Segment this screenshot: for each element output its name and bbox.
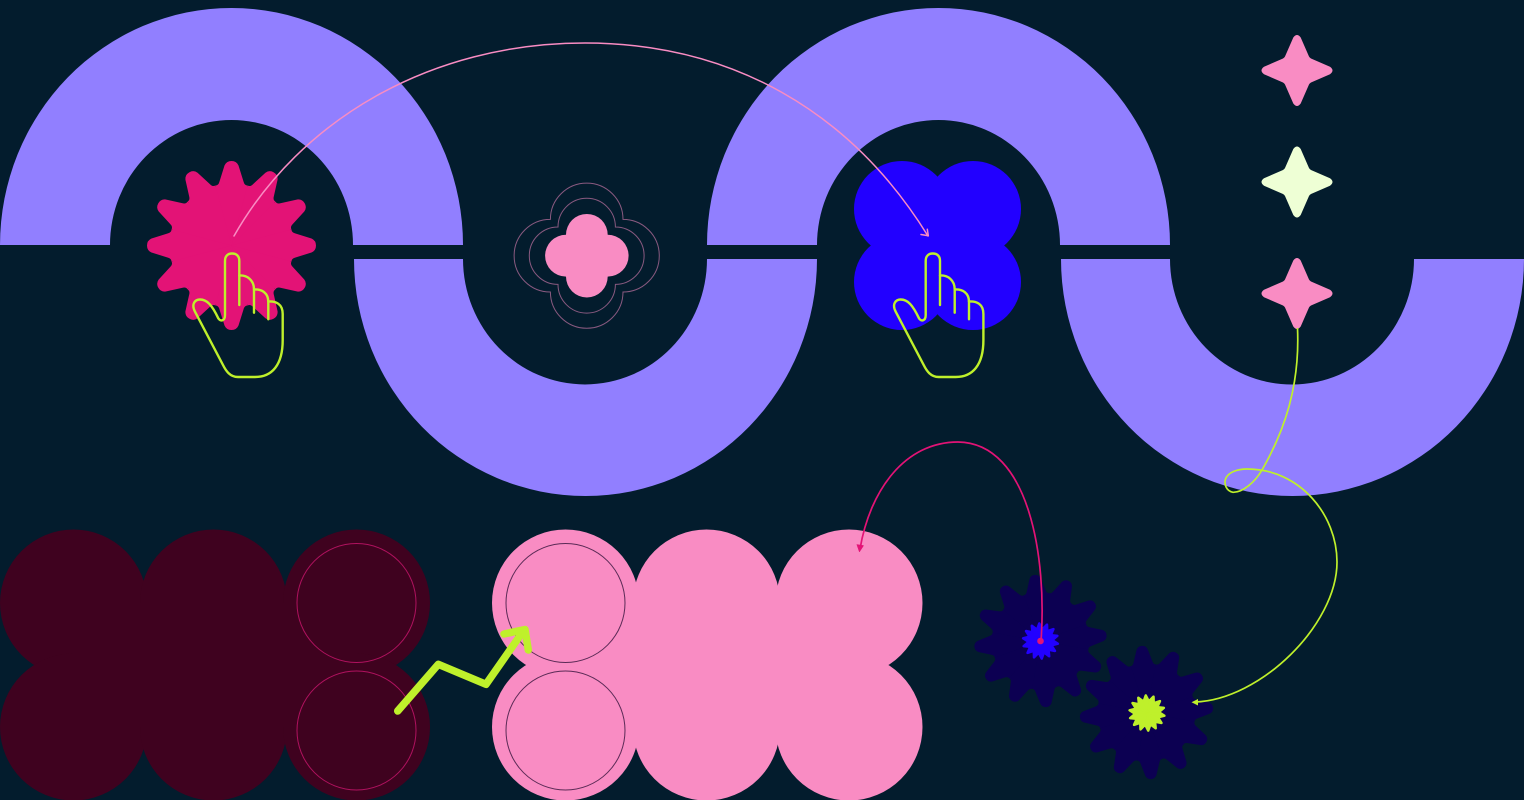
- outer outline: [514, 183, 659, 328]
- maroon six-circle cluster: [0, 530, 430, 800]
- arrow: lime zigzag trend: [398, 630, 528, 711]
- arrow: magenta curve from gear to pink cluster: [857, 442, 1044, 644]
- sparkle: pale green: [1262, 146, 1332, 218]
- arch band: wave of purple semicircles: [0, 8, 1524, 496]
- inner ring bottom: [506, 671, 625, 790]
- inner outline: [529, 198, 644, 313]
- pink six-circle cluster: [492, 530, 922, 800]
- magenta starburst: [147, 161, 316, 330]
- inner ring top: [506, 544, 625, 662]
- sparkle: pink bottom: [1262, 258, 1332, 329]
- arch 1: [0, 8, 463, 245]
- lime mini starburst: [1127, 693, 1167, 733]
- four-point sparkles: [1262, 35, 1332, 329]
- blue mini starburst: [1020, 621, 1061, 661]
- dark gear right: [1075, 641, 1218, 784]
- arrow: lime looping curve from sparkle to gear: [1192, 328, 1337, 706]
- solid quatrefoil: [545, 214, 629, 297]
- sparkle: pink top: [1262, 35, 1332, 106]
- icon: hand pointer right: [894, 254, 983, 377]
- arch 4 (inverted): [1061, 259, 1524, 496]
- icon: hand pointer left: [193, 254, 283, 377]
- inner ring top: [297, 544, 416, 662]
- central pink quatrefoil with outlines: [514, 183, 659, 328]
- arrow: pink arc from starburst to blue shape: [234, 43, 928, 236]
- arch 2 (inverted): [354, 259, 817, 496]
- dark gear left: [969, 569, 1112, 713]
- inner ring bottom: [297, 671, 416, 790]
- arch 3: [707, 8, 1170, 245]
- blue four-circle shape: [854, 161, 1021, 330]
